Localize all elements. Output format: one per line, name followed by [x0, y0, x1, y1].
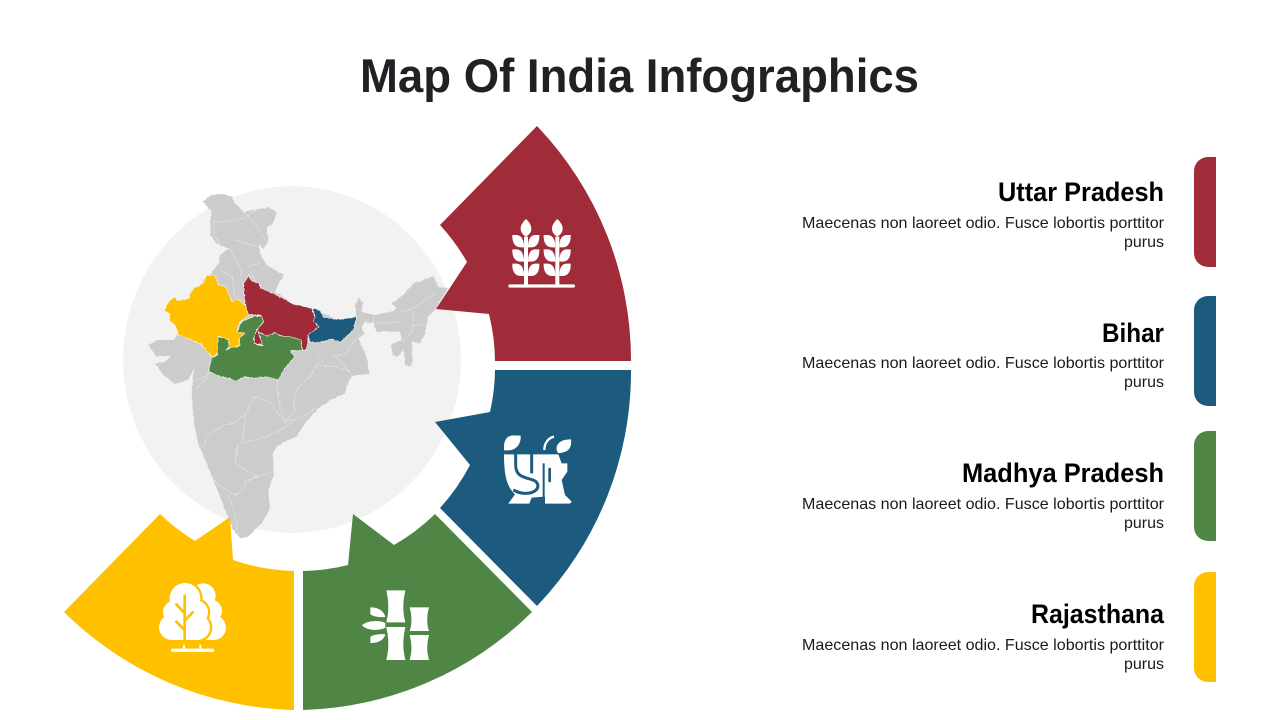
- text: Uttar Pradesh description: Maecenas non laoreet odio. Fusce lobortis porttitor: [802, 215, 1165, 232]
- item: Rajasthana: [802, 572, 1216, 682]
- text: Rajasthana description: purus: [1124, 656, 1164, 673]
- icon: bamboo: [362, 590, 429, 660]
- item: Uttar Pradesh: [802, 157, 1216, 267]
- heading: Bihar: Bihar: [1102, 318, 1164, 348]
- tab: red: [1194, 157, 1216, 267]
- text: Bihar description: purus: [1124, 374, 1164, 391]
- segment: green (Madhya Pradesh): [303, 514, 532, 710]
- map: Rajasthan: [164, 275, 249, 357]
- map: Madhya Pradesh: [208, 316, 302, 382]
- segment: yellow (Rajasthana): [64, 514, 294, 710]
- segment: red (Uttar Pradesh): [436, 126, 631, 361]
- text: Rajasthana description: Maecenas non laoreet odio. Fusce lobortis porttitor: [802, 637, 1165, 654]
- icon: wheat: [508, 219, 575, 288]
- background circle: [123, 186, 461, 533]
- heading: Uttar Pradesh: Uttar Pradesh: [998, 177, 1164, 207]
- text: Madhya Pradesh description: Maecenas non laoreet odio. Fusce lobortis porttitor: [802, 496, 1165, 513]
- text: Uttar Pradesh description: purus: [1124, 234, 1164, 251]
- tab: yellow: [1194, 572, 1216, 682]
- map: base country outline: [148, 194, 448, 538]
- title: Map Of India Infographics: [360, 49, 919, 102]
- text: Madhya Pradesh description: purus: [1124, 515, 1164, 532]
- tab: blue: [1194, 296, 1216, 406]
- text: Bihar description: Maecenas non laoreet odio. Fusce lobortis porttitor: [802, 355, 1165, 372]
- heading: Rajasthana: Rajasthana: [1031, 599, 1165, 629]
- item: Bihar: [802, 296, 1216, 406]
- icon: trees: [159, 581, 226, 652]
- map: Uttar Pradesh: [243, 274, 319, 350]
- icon: carved tree: [504, 435, 572, 505]
- segment: blue (Bihar): [435, 370, 631, 606]
- tab: green: [1194, 431, 1216, 541]
- map: Bihar: [308, 308, 357, 343]
- item: Madhya Pradesh: [802, 431, 1216, 541]
- heading: Madhya Pradesh: Madhya Pradesh: [962, 458, 1164, 488]
- map: internal state borders: [194, 209, 435, 530]
- map of India: [148, 194, 448, 538]
